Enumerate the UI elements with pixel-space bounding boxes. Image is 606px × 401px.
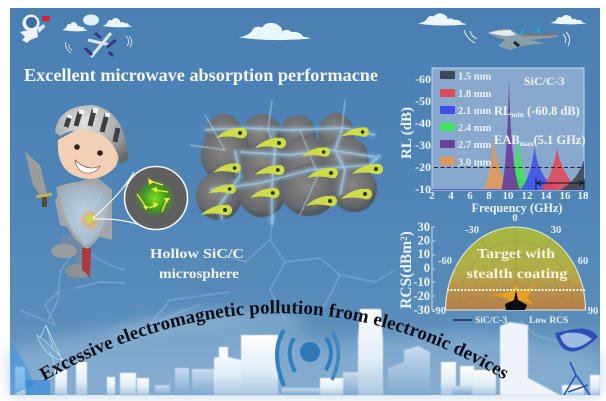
RCS axis scale: 20: [418, 234, 430, 248]
threshold line: [434, 166, 584, 168]
RCS axis scale: -20: [413, 289, 430, 303]
dotted threshold: [447, 289, 585, 291]
RCS axis title: RCS(dBm: [398, 241, 415, 309]
legend: [453, 316, 568, 326]
chart: radar cross section polar plot: [398, 213, 598, 326]
target label: [466, 247, 568, 282]
annotations: EAB: [494, 133, 520, 147]
microsphere label: microsphere: [159, 267, 239, 282]
angle labels: -90: [432, 306, 446, 317]
RCS axis scale: -10: [413, 275, 430, 289]
icon: wireless signal emitter: [277, 330, 338, 386]
sword: [25, 152, 52, 207]
annotations: SiC/C-3: [524, 74, 565, 88]
x axis ticks: 2: [429, 190, 435, 202]
bandwidth arrow: [536, 178, 584, 190]
y axis ticks: -60: [415, 72, 431, 86]
stealth aircraft silhouette: [505, 290, 527, 310]
legend: 1.5 mm: [458, 72, 491, 82]
legend: [440, 71, 491, 168]
x axis ticks: 14: [540, 190, 552, 202]
face: [58, 122, 122, 179]
electrons: [201, 127, 383, 215]
cloud scene: left clouds: [62, 14, 132, 31]
microsphere label: [150, 247, 244, 282]
shield: [58, 183, 110, 247]
y axis ticks: -50: [415, 94, 431, 108]
lightning bolts in background: [20, 205, 570, 345]
x axis ticks: 12: [522, 190, 533, 202]
spheres: [196, 113, 377, 220]
x axis ticks: 10: [502, 190, 514, 202]
legend: 2.7 mm: [458, 140, 491, 151]
cloud: right pair: [418, 13, 587, 26]
knight character: [25, 105, 188, 278]
title: Excellent microwave absorption performacne: [24, 65, 378, 85]
annotations: RL: [494, 104, 511, 118]
x axis ticks: 8: [486, 190, 492, 202]
RCS axis scale: 10: [418, 247, 430, 261]
RCS axis scale: [413, 220, 435, 317]
x axis ticks: [429, 190, 589, 202]
y axis ticks: -30: [415, 138, 431, 152]
y axis ticks: [415, 72, 431, 196]
legend: 3.0 mm: [458, 158, 491, 168]
red cape: [82, 248, 91, 278]
legend: Low RCS: [529, 316, 568, 326]
angle labels: 0: [512, 213, 518, 224]
annotations: min: [511, 110, 525, 119]
dome: [446, 227, 586, 310]
RCS axis scale: 30: [418, 220, 430, 234]
annotations: max: [520, 139, 534, 148]
target label: Target with: [477, 247, 555, 262]
target reflection: [491, 285, 535, 306]
legend: 1.8 mm: [458, 89, 491, 100]
chart: reflection loss vs frequency: [399, 68, 589, 215]
icon: right satellite dish: [555, 329, 598, 395]
lightning over spheres: [190, 100, 380, 225]
icon: fighter jet: [464, 26, 570, 50]
icon: left satellite dish: [10, 325, 63, 395]
y axis ticks: -20: [415, 160, 431, 174]
legend: 2.4 mm: [458, 123, 491, 134]
RCS axis scale: 0: [424, 261, 430, 275]
plot area: [432, 68, 584, 190]
x axis ticks: 18: [578, 190, 589, 202]
RCS axis scale: -30: [413, 303, 430, 317]
angle labels: 60: [578, 256, 588, 267]
background haze: [10, 311, 600, 395]
legend: 2.1 mm: [458, 106, 491, 117]
microsphere label: Hollow SiC/C: [150, 247, 244, 262]
polar grid: [449, 227, 583, 310]
x axis title: Frequency (GHz): [472, 200, 562, 215]
angle labels: [432, 213, 598, 317]
RCS axis title: ): [398, 231, 415, 236]
curved caption: Excessive electromagnetic pollution from electronic devices: [38, 300, 508, 381]
angle labels: -60: [438, 256, 452, 267]
body: [55, 178, 112, 240]
target label: stealth coating: [466, 267, 568, 282]
y axis ticks: -40: [415, 116, 431, 130]
legs and boots: [51, 235, 92, 278]
callout magnifier: [93, 166, 188, 230]
annotations: (-60.8 dB): [524, 104, 580, 118]
hollow SiC/C microsphere cluster: [190, 100, 383, 225]
lightning glow over spheres: [205, 128, 380, 225]
angle labels: 90: [588, 306, 598, 317]
y axis title: RL (dB): [399, 107, 415, 159]
cloud: center top: [239, 23, 311, 40]
x axis ticks: 16: [560, 190, 571, 202]
icon: astronaut: [20, 14, 50, 43]
y axis ticks: -10: [415, 182, 431, 196]
angle labels: -30: [465, 225, 479, 236]
angle labels: 30: [551, 225, 561, 236]
absorption peaks: [432, 78, 584, 190]
x axis ticks: 4: [448, 190, 454, 202]
annotations: [494, 74, 586, 148]
icon: satellite: [66, 33, 132, 57]
helmet: [55, 105, 128, 164]
x axis ticks: 6: [467, 190, 473, 202]
city skyline: [15, 309, 600, 395]
annotations: (5.1 GHz): [533, 133, 586, 147]
RCS axis title: 2: [399, 236, 409, 241]
legend: SiC/C-3: [475, 316, 507, 326]
